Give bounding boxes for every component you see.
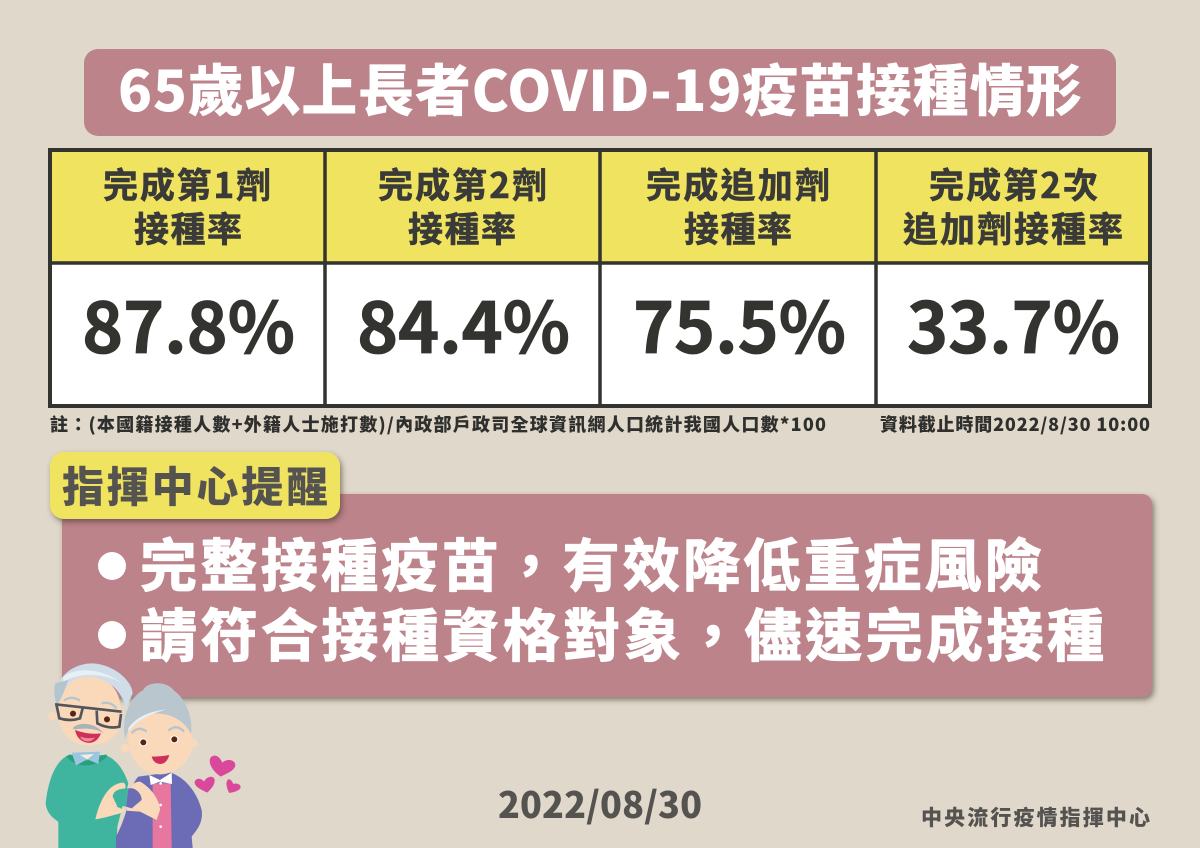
illustration: elderly couple <box>46 663 241 848</box>
reminder 1: 完整接種疫苗，有效降低重症風險 <box>140 521 1042 603</box>
column 4: second booster <box>903 158 1123 374</box>
column 4: second booster: 33.7% <box>907 273 1120 374</box>
footnote: 註：(本國籍接種人數+外籍人士施打數)/內政部戶政司全球資訊網人口統計我國人口數*100 <box>50 411 826 437</box>
vaccination rate table <box>50 150 1150 406</box>
panel: reminders <box>62 494 1152 697</box>
title banner: 65歲以上長者COVID-19疫苗接種情形 <box>118 47 1082 128</box>
column 2: second dose: 接種率 <box>408 202 516 253</box>
hands forming a heart <box>95 782 160 820</box>
column 3: booster: 完成追加劑 <box>646 158 830 209</box>
date: 2022/08/30 <box>498 777 702 829</box>
column 1: first dose: 接種率 <box>134 202 242 253</box>
column 3: booster <box>633 158 846 374</box>
heading tag: 指揮中心提醒 <box>62 454 328 515</box>
column 2: second dose: 完成第2劑 <box>378 158 547 209</box>
hearts <box>195 756 241 793</box>
woman <box>116 683 202 848</box>
column 1: first dose: 完成第1劑 <box>103 158 271 209</box>
column 3: booster: 75.5% <box>633 273 846 374</box>
column 2: second dose <box>357 158 570 374</box>
reminder 2: 請符合接種資格對象，儘速完成接種 <box>140 591 1104 673</box>
column 4: second booster: 完成第2次 <box>929 158 1098 209</box>
column 4: second booster: 追加劑接種率 <box>903 202 1123 253</box>
data cutoff time: 資料截止時間2022/8/30 10:00 <box>880 411 1150 437</box>
issuing organisation: 中央流行疫情指揮中心 <box>921 802 1150 832</box>
column 3: booster: 接種率 <box>684 202 792 253</box>
column 1: first dose <box>82 158 295 374</box>
column 2: second dose: 84.4% <box>357 273 570 374</box>
man <box>46 663 133 848</box>
column 1: first dose: 87.8% <box>82 273 295 374</box>
